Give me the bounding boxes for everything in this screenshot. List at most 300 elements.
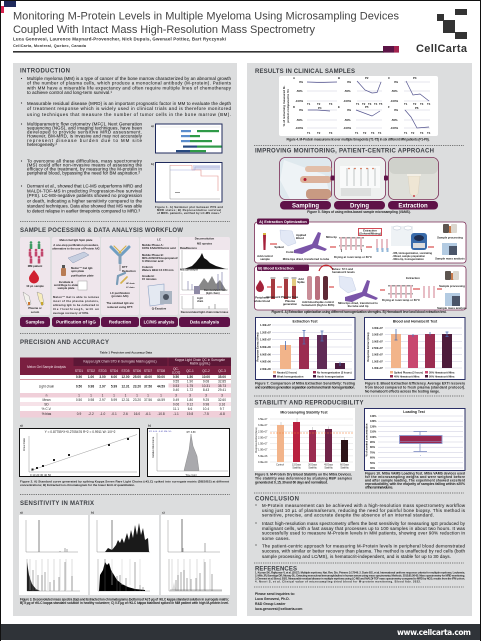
workflow column: reduction: Reduction <box>122 269 136 273</box>
table 1: STD8 <box>157 369 165 373</box>
workflow step labels: LC/MS analysis <box>144 320 175 325</box>
panel: extraction optimization: Mitra tip <box>326 235 337 239</box>
intro text: narrow bullets: However, BM-MRD, is invasive and may not accurately <box>27 134 143 138</box>
table 1: 0.49 <box>173 398 179 402</box>
workflow column: purification: Incubate & <box>59 280 73 284</box>
table 1: 44.59 <box>157 384 165 388</box>
intro text: narrow bullets: Dermani et al., showed that LC-MS outperforms MRD and <box>27 184 143 188</box>
figure 10 caption: of the nominal volume. <box>365 486 393 490</box>
figure 4: clinical charts: -100% <box>390 99 399 103</box>
workflow column: LC/MS: Mobile Phase B: <box>142 253 164 257</box>
table 1: 2.6 <box>123 412 128 416</box>
legend: 30% Hematocrit Mitra <box>429 371 455 374</box>
chart: microsampling stability test <box>254 408 355 471</box>
table 1: 9.25 <box>203 398 209 402</box>
legend: 40% Hematocrit Mitra <box>394 375 420 378</box>
icon: blood drop <box>29 270 39 284</box>
figure 1 caption: Figure 1. A) Swimmer plot between PFS and <box>155 205 223 209</box>
section: references <box>255 566 465 584</box>
figure 4: clinical charts: 0% <box>347 108 352 112</box>
chart: blood and hematocrit test: 3.50E+07 <box>372 334 383 337</box>
chart: microsampling stability test: 3.0E+07 <box>258 424 268 427</box>
table 1: STD2 <box>87 369 95 373</box>
table 1: 0.98 <box>88 384 94 388</box>
figure 4: clinical charts: P2 <box>365 76 369 80</box>
table 1: 25.00 <box>133 375 141 379</box>
legend: Neutral (3 hours) <box>277 371 297 374</box>
chart: microsampling stability test: Stability <box>308 466 317 470</box>
figure 2a: standard curve: a) <box>20 424 23 428</box>
workflow column: samples <box>20 237 50 315</box>
table 1: 19.8 <box>187 412 193 416</box>
figure 4: clinical charts: E <box>338 105 340 109</box>
figure 4: clinical charts: C <box>388 76 390 80</box>
panel: extraction optimization: - Mixed, sample preparation <box>392 255 426 258</box>
chart: microsampling stability test: 2.0E+07 <box>258 436 268 439</box>
panel: blood extraction: Peripheral <box>255 296 269 300</box>
connectors <box>330 176 388 180</box>
chart: extraction test: 2.00E+06 <box>260 368 271 371</box>
figure 1a: swimmer plot <box>151 124 222 153</box>
workflow column: samples: MM patient <box>28 264 42 268</box>
figure 3 caption: Figure 3. Deconvoluted mass spectra (top) and Extracted Ion chromatograms (bottom) of A) 5 µg of rKLC kappa standard solution in surrogate matrix; <box>20 598 229 602</box>
figure 2b: chromatogram: b) <box>148 424 151 428</box>
figure 1a: swimmer plot: a) <box>151 124 154 128</box>
table 1: QC-2 <box>202 369 210 373</box>
chart: blood and hematocrit test: 2.00E+07 <box>372 354 383 357</box>
workflow column: reduction: LC chain <box>126 287 135 289</box>
icon: reduced chains <box>117 273 127 284</box>
table 1: STD7 <box>144 369 152 373</box>
section: precision and accuracy: Table 1 Precision and Accuracy Data <box>100 350 152 354</box>
icon: bottles and instrument <box>445 271 460 306</box>
website URL: www.cellcarta.com <box>397 628 471 637</box>
table 1: 3 <box>205 394 207 398</box>
table 1: 10.4 <box>203 407 209 411</box>
figure 4: clinical charts: -50% <box>344 89 351 93</box>
table 1: 0.55 <box>173 380 179 384</box>
figure 4: clinical charts: -100% <box>343 99 352 103</box>
figure 4: clinical charts: T1 <box>355 131 359 135</box>
table 1: 0.40 <box>173 388 179 392</box>
title: Coupled With Intact Mass High-Resolution Mass Spectrometry <box>13 24 316 36</box>
conclusion bullets: sample processing and LC/MS), is hematocrit-independent, and is stable for up to 30 days. <box>262 554 451 559</box>
chart: loading test box plot: 80% <box>370 446 376 449</box>
table 1: 0.50 <box>76 398 82 402</box>
figure 4: clinical charts <box>279 76 438 136</box>
chart: loading test box plot: Loading Test <box>403 410 426 414</box>
figure 3a: spectra <box>19 510 88 595</box>
figure 4: clinical charts: T3 <box>329 102 333 106</box>
contact details: Please send inquiries to: <box>255 592 295 596</box>
workflow column: LC/MS: Waters BEH C4 150 mm <box>142 268 174 272</box>
figure 4: clinical charts: T4 <box>378 131 382 135</box>
chart: loading test box plot: 100% <box>370 436 377 439</box>
figure 10 caption: and after sample loading. The experiment showed excellent <box>365 478 466 482</box>
figure 4: clinical charts: T2 <box>363 131 367 135</box>
intro text: narrow bullets: to detect relapse in earlier timepoints compared to MRD.³ <box>27 208 141 214</box>
spectrum: raw dense <box>180 250 229 271</box>
chart: blood and hematocrit test: Response Extract (Area) <box>367 332 370 362</box>
workflow column: purification: alternative to the use of Protein A/G <box>52 246 100 250</box>
figure 2b: chromatogram: Time (min) <box>185 474 197 477</box>
reference list: 4. Noori S, et al. Clinical value of microsampling dried blood for M-protein monitoring. Blood Adv. 2022. <box>255 580 421 584</box>
figure 8 caption: Figure 8. Blood Extraction Efficiency. Average EXTI recovery <box>365 382 465 386</box>
workflow column: reduction: The oxidized IgG are <box>106 301 134 305</box>
workflow column: LC/MS: 100% FA/H2O/formic acid <box>142 246 176 250</box>
spectrum: inset: (light chain) <box>206 292 220 295</box>
icon: plate and shaker <box>391 226 427 250</box>
table 1: 1 <box>78 394 80 398</box>
workflow step labels: Reduction <box>109 320 131 325</box>
icon: patients <box>29 241 43 264</box>
workflow column: purification: sample plate <box>58 286 75 290</box>
figure 4: clinical charts: T4 <box>427 131 431 135</box>
table 1: 3.16 <box>219 402 225 406</box>
figure 4 caption: Figure 4. M-Protein measurement over multiple timepoints (T1-T5) in six different MM patients (P1-P6). <box>286 138 430 142</box>
spectrum: deconvoluted: chain <box>197 300 204 303</box>
figure 4: clinical charts: -100% <box>295 126 304 130</box>
conclusion bullets <box>255 503 466 559</box>
workflow step labels <box>20 317 230 327</box>
workflow column: reduction: DTT <box>122 265 128 269</box>
workflow column: data analysis: Deconvolution <box>195 236 214 240</box>
conclusion bullets: malignant cells, with a fast assay that processes up to 100 samples in about two hours. It was <box>262 526 466 531</box>
heading: improving monitoring: IMPROVING MONITORING, PATIENT-CENTRIC APPROACH <box>255 148 434 154</box>
figure 4: clinical charts: T3 <box>371 131 375 135</box>
icon: blood tube <box>263 235 266 250</box>
panel: extraction optimization: Add control <box>257 254 273 258</box>
workflow column: samples: 10 µL sample <box>26 284 44 288</box>
figure 3 caption: B) 5 µg of rKLC kappa standard solution in healthy volunteer; C) 0.5 µg of rKLC kappa standard spiked in MM patient with high M-protein level. <box>20 601 229 605</box>
conclusion bullets: M-Protein measurement can be achieved with a high-resolution mass spectrometry workflow <box>262 503 466 508</box>
panel: blood extraction: hematocrit (high to 80%) <box>302 303 334 307</box>
chart: loading test box plot: % of nominal concentration <box>366 423 368 456</box>
table 1: Matrix (µg/mL) <box>190 362 210 366</box>
intro text: wide bullets: with MM have a miserable life expectancy and often require multiple lines of chemotherapy <box>27 86 232 90</box>
figure 4: clinical charts: 0% <box>299 80 304 84</box>
figure 9 caption: generated at 0, 15, 30 and 60 days and normalized. <box>255 480 328 484</box>
heading: results: RESULTS IN CLINICAL SAMPLES <box>255 69 355 75</box>
figure 2a: standard curve: Y = 0.87755*X+0.2705476 R^2 = 0.9911 W: 1/X^2 <box>45 430 116 434</box>
section: introduction <box>20 68 232 215</box>
legend <box>273 371 352 378</box>
workflow column: reduction: HC chain <box>126 283 135 285</box>
chart: microsampling stability test: Control <box>276 464 284 466</box>
figure 2 caption: concentrations; B) Extracted ion chromatogram for the lower limit of quantitation. <box>20 483 135 487</box>
section: conclusion <box>255 496 466 559</box>
figure 10 caption: Figure 10. Mitra VAMS Loading Test. Mitra VAMS devices used <box>365 472 465 476</box>
table 1: 12.31 <box>122 398 130 402</box>
chart: microsampling stability test: Stability <box>324 466 333 470</box>
table 1: 2.97 <box>99 384 106 388</box>
table 1: 0.9 <box>77 412 81 416</box>
figure 4: clinical charts: A <box>293 76 295 80</box>
table 1: 2.97 <box>99 398 106 402</box>
figure 2a: standard curve <box>20 424 140 477</box>
workflow column: LC/MS <box>140 237 178 315</box>
table 1: 0.06 <box>173 402 179 406</box>
workflow column: purification: spin plate <box>71 269 84 273</box>
workflow column: data analysis: Deconvoluted light chain intact mass <box>181 310 229 314</box>
figure 3c: spectra <box>161 510 230 595</box>
intro text: narrow bullets: represent disease burden due to MM site <box>27 138 143 143</box>
workflow column: reduction <box>101 237 139 315</box>
legend: 50% Hematocrit Mitra <box>429 375 455 378</box>
chart: extraction test: 8.00E+06 <box>260 346 271 349</box>
conclusion bullets: sensitive, precise, and accurate despite the absence of an internal standard. <box>262 512 434 517</box>
table 1: Mean <box>43 398 51 402</box>
table 1: 3 <box>175 394 177 398</box>
figure 4: clinical charts: -50% <box>296 89 303 93</box>
icon: collection plate <box>78 281 87 290</box>
figure 4: clinical charts: T1 <box>404 102 408 106</box>
figure 4: clinical charts: T5 <box>379 102 383 106</box>
figure 4: clinical charts: T3 <box>329 131 333 135</box>
figure 1b: survival curves <box>151 162 222 202</box>
table 1: 3 <box>189 394 191 398</box>
panel: extraction optimization: Control <box>286 250 296 254</box>
panel: extraction optimization: - MS, Homogenization, sonicating <box>392 252 432 255</box>
step labels: sampling, drying, extraction: Drying <box>350 204 369 210</box>
workflow column: purification: Melon™ Gel IgG <box>71 266 93 270</box>
panel: blood extraction: generation <box>283 302 297 306</box>
icon: graded tubes <box>307 276 328 300</box>
figure 2b: chromatogram: Relative Abundance <box>152 436 155 458</box>
chart: loading test box plot: 140% <box>370 415 377 418</box>
heading: references: REFERENCES <box>255 566 297 572</box>
figure 1b: survival curves: b) <box>151 162 154 166</box>
figure 3 caption <box>20 598 229 605</box>
chart: blood and hematocrit test: 2.50E+07 <box>372 347 383 350</box>
spectrum: charge states: MS1 protocol <box>180 268 198 272</box>
table 1: 10.00 <box>202 375 210 379</box>
authors: Luca Genovesi, Laurence Maynard-Provencher, Nick Dupuis, Gwenael Pottiez, Bart Ryczynski <box>13 36 226 42</box>
conclusion bullets: some cases. <box>262 536 290 541</box>
icon: centrifuge tubes <box>270 277 296 299</box>
chart: blood and hematocrit test <box>364 318 465 380</box>
panel: blood extraction: Sample processing <box>439 284 465 288</box>
workflow column: LC/MS: 80% ACN/10%isopropanol/ <box>142 256 178 260</box>
chart: microsampling stability test: 1.5E+07 <box>258 443 268 446</box>
intro text: narrow bullets: (PFS). LC-MS-negative patients showed no progression <box>27 193 143 198</box>
figure 6 caption: Figure 6. A) Extraction optimization using different homogenization strengths. B) Hematocrit level and blood extraction test. <box>272 310 447 314</box>
spectrum: inset: Deconvoluted mass <box>204 289 227 292</box>
intro text: wide bullets: Multiple myeloma (MM) is a type of cancer of the bone marrow characterized by an abnormal growth <box>27 76 232 81</box>
intro text: narrow bullets: sequencing (NGS), and imaging techniques, have been <box>27 126 143 130</box>
chart: loading test box plot: 120% <box>370 425 377 428</box>
spectrum: deconvoluted: Light <box>197 297 203 300</box>
figure 4: clinical charts: -100% <box>343 126 352 130</box>
heading: conclusion: CONCLUSION <box>255 496 299 502</box>
figure 4: clinical charts: T1 <box>356 102 360 106</box>
table 1: 5.99 <box>111 384 117 388</box>
table 1: QC-3 <box>218 369 226 373</box>
panel: left column <box>13 63 237 616</box>
figure 4: clinical charts: 0% <box>394 108 399 112</box>
workflow column: samples: serum <box>31 310 40 314</box>
chart: microsampling stability test: Response Extract (Area) <box>255 427 258 453</box>
chart: blood and hematocrit test: 1.00E+07 <box>372 367 383 370</box>
table 1: 0.98 <box>88 398 94 402</box>
purification text: allowing IgG to be collected in <box>53 303 99 307</box>
table 1: 1.72 <box>187 388 193 392</box>
chart: extraction test: 1.40E+07 <box>260 324 271 327</box>
table 1: 50.00 <box>157 375 165 379</box>
table 1: 3.00 <box>99 375 106 379</box>
figure 1 caption: of MRD- patients, verified by LC-MS mass.³ <box>157 211 221 215</box>
table 1: SD <box>44 402 49 406</box>
photo: sampling <box>280 158 332 200</box>
figure 4: clinical charts: T1 <box>307 102 311 106</box>
table 1: 37.56 <box>144 384 152 388</box>
figure 2a: standard curve: 0 10 20 30 40 50 <box>30 473 51 477</box>
figure 4: clinical charts: -50% <box>391 89 398 93</box>
legend: Weak homogenization <box>277 375 304 378</box>
figure 2b: chromatogram <box>148 424 230 477</box>
figure 4: clinical charts: 0% <box>299 108 304 112</box>
panel: extraction optimization: - Mitra tip, homogenization <box>392 258 424 261</box>
workflow column: purification <box>52 237 100 315</box>
callout: extraction box <box>358 228 382 236</box>
panel: blood extraction: Sample mass analysis <box>437 306 467 310</box>
table 1: 1 <box>113 394 115 398</box>
workflow column: LC/MS: 0.1%formic acid <box>142 259 164 263</box>
panel: extraction optimization: sample <box>260 257 270 261</box>
table 1: 1 <box>102 394 104 398</box>
chart: extraction test: Extraction Test <box>292 320 318 324</box>
table 1: QC- <box>173 367 179 371</box>
chart: loading test box plot: 40% <box>370 467 376 470</box>
panel: blood extraction: the tube and tip <box>348 304 369 308</box>
chart: blood and hematocrit test: 1.50E+07 <box>372 360 383 363</box>
figure 4: clinical charts: 0% <box>394 80 399 84</box>
panel: extraction optimization: Drying at room temp or 60°C <box>334 255 372 259</box>
heading: stability: STABILITY AND REPRODUCIBILITY <box>254 400 364 406</box>
icon: antibody <box>111 246 129 263</box>
table 1: 1.80 <box>187 398 193 402</box>
figure 4: clinical charts: protein compared to V1 <box>286 89 290 123</box>
chart: extraction test <box>256 318 355 380</box>
panel: extraction optimization: Sample mass analysis <box>435 256 465 260</box>
table 1: -7.5 <box>203 412 209 416</box>
figure 10 caption <box>365 472 466 490</box>
section: sensitivity in matrix <box>19 501 230 605</box>
table 1: 1 <box>160 394 162 398</box>
table 1: 1 <box>136 394 138 398</box>
purification text: Melon™ Gel is able to remove <box>53 295 99 299</box>
table 1: Kappa Light Chain QC in Surrogate <box>175 358 225 362</box>
table 1: 32.60 <box>218 398 226 402</box>
chart: microsampling stability test: Stability <box>292 466 301 470</box>
intro text: wide bullets: to achieve control and long-term survival.¹ <box>27 90 113 95</box>
chart: microsampling stability test: 60 Days <box>340 464 350 466</box>
header banner <box>1 1 468 55</box>
intro text: narrow bullets: heterogeneity.² <box>27 142 58 147</box>
table 1: LLOQ <box>172 370 181 374</box>
step labels: sampling, drying, extraction: Sampling <box>292 204 319 210</box>
panel: blood extraction: Extraction <box>406 276 420 280</box>
section: precision and accuracy <box>20 340 231 487</box>
table 1: STD6 <box>133 369 141 373</box>
chart: microsampling stability test: 30 Days <box>308 464 318 466</box>
figure 3a: spectra: a) <box>20 510 23 514</box>
table 1: 1.90 <box>187 380 193 384</box>
table 1: Melon Gel Sample Analysis <box>27 365 66 369</box>
table 1: 1 <box>147 394 149 398</box>
panel: extraction optimization: Applied <box>296 233 307 237</box>
chart: microsampling stability test: Stability <box>340 466 349 470</box>
figure 4: clinical charts: T3 <box>420 131 424 135</box>
panel: blood extraction: Tube <box>292 295 299 299</box>
panel: blood extraction: Add blood/spike control <box>302 300 334 304</box>
reference list: 1. Kumar SK, Rajkumar V, et al. (2017). Multiple myeloma. Nat. Rev. Dis. Primers 3:17046. 2. Durie BG, et al. International uniform response criteria for multiple myeloma. Leukemia. <box>255 570 465 574</box>
figure 4: clinical charts: T4 <box>374 102 378 106</box>
figure 3c: spectra: c) <box>162 510 165 514</box>
figure 2 caption <box>20 480 229 487</box>
panel: blood extraction <box>253 264 467 310</box>
figure 7 caption: and conditions generation separation control and harsh homogenization. <box>255 386 355 390</box>
table 1: 8.43 <box>203 388 209 392</box>
title <box>13 10 400 36</box>
panel: extraction optimization: Blood <box>296 236 304 240</box>
chart: extraction test: 4.00E+06 <box>260 361 271 364</box>
logo: CellCarta: CellCarta <box>416 43 468 55</box>
intro text: narrow bullets: (MS) could offer non-invasive means of assessing the <box>27 162 143 168</box>
figure 4: clinical charts: T2 <box>317 131 321 135</box>
legend <box>390 371 455 378</box>
workflow column: data analysis <box>179 236 230 315</box>
reference list: 3. Dermani et al. Blood, 2021. Measurable residual disease in multiple myeloma using LC-MS and MALDI-TOF mass spectrometry compared to MRD by NGS; results from the IFM cohort. <box>255 576 465 580</box>
table 1: 12.31 <box>122 384 130 388</box>
table 1: 9.7 <box>220 407 224 411</box>
table 1: % C.V. <box>42 407 52 411</box>
figure 4: clinical charts: T1 <box>404 131 408 135</box>
workflow column: reduction: LC purification <box>110 291 130 295</box>
conclusion bullets: The patient-centric approach for measuring M-Protein levels in peripheral blood demonstrated <box>262 544 466 548</box>
panel: blood extraction: Plasma <box>281 295 291 299</box>
table 1: 5.99 <box>111 398 117 402</box>
conclusion bullets: using just 10 µL of plasma/serum, reducing the need for painful bone biopsy. This method is <box>262 508 466 513</box>
table 1: STD5 <box>121 369 130 373</box>
legend: Spiked Plasma (3 hours) <box>394 371 423 374</box>
figure 8 caption: from blood compared to fresh plasma (standard protocol). <box>365 386 465 390</box>
workflow column: data analysis: MS spectra <box>197 242 212 246</box>
table 1: 1.75 <box>187 384 193 388</box>
chart: microsampling stability test: 1.0E+07 <box>258 449 268 452</box>
table 1: -1.1 <box>173 412 179 416</box>
figure 5 caption: Figure 5. Steps of using mitra-based sample microsampling (VAMS). <box>307 210 411 214</box>
figure 7 caption <box>255 382 355 390</box>
callout: extraction box: Extraction <box>363 228 377 232</box>
heading: workflow: SAMPLE POCESSING & DATA ANALYSIS WORKFLOW <box>20 228 183 234</box>
figure 4: clinical charts: T3 <box>420 102 424 106</box>
table 1: 0.98 <box>203 402 209 406</box>
intro text: narrow bullets: or death, indicating a higher sensitivity compared to the <box>27 198 143 204</box>
contact details: R&D Group Leader <box>255 602 286 606</box>
intro text: narrow bullets <box>21 122 143 214</box>
figure 4: clinical charts: T2 <box>413 102 417 106</box>
table 1: 0.50 <box>76 384 82 388</box>
panel: extraction optimization: Mitra tips dried, transferred to tube <box>283 257 330 261</box>
affiliation: CellCarta, Montreal, Quebec, Canada <box>13 44 87 48</box>
figure 4: clinical charts: P4 <box>318 106 322 110</box>
figure 1 caption: MRD status; B) Representative survival <box>157 208 221 212</box>
reference list: 2. Mills JR, Barnidge DR, Murray DL. Detecting monoclonal immunoglobulins in human serum using mass spectrometry. Methods. 2015;81:56-65. Mass spectrometry for MRD monitoring. <box>255 574 465 578</box>
contact details: luca.genovesi@cellcarta.com <box>255 607 302 611</box>
section: results in clinical samples <box>255 69 438 142</box>
panel: blood extraction: Mitra tips dried, transferred to <box>338 301 378 305</box>
